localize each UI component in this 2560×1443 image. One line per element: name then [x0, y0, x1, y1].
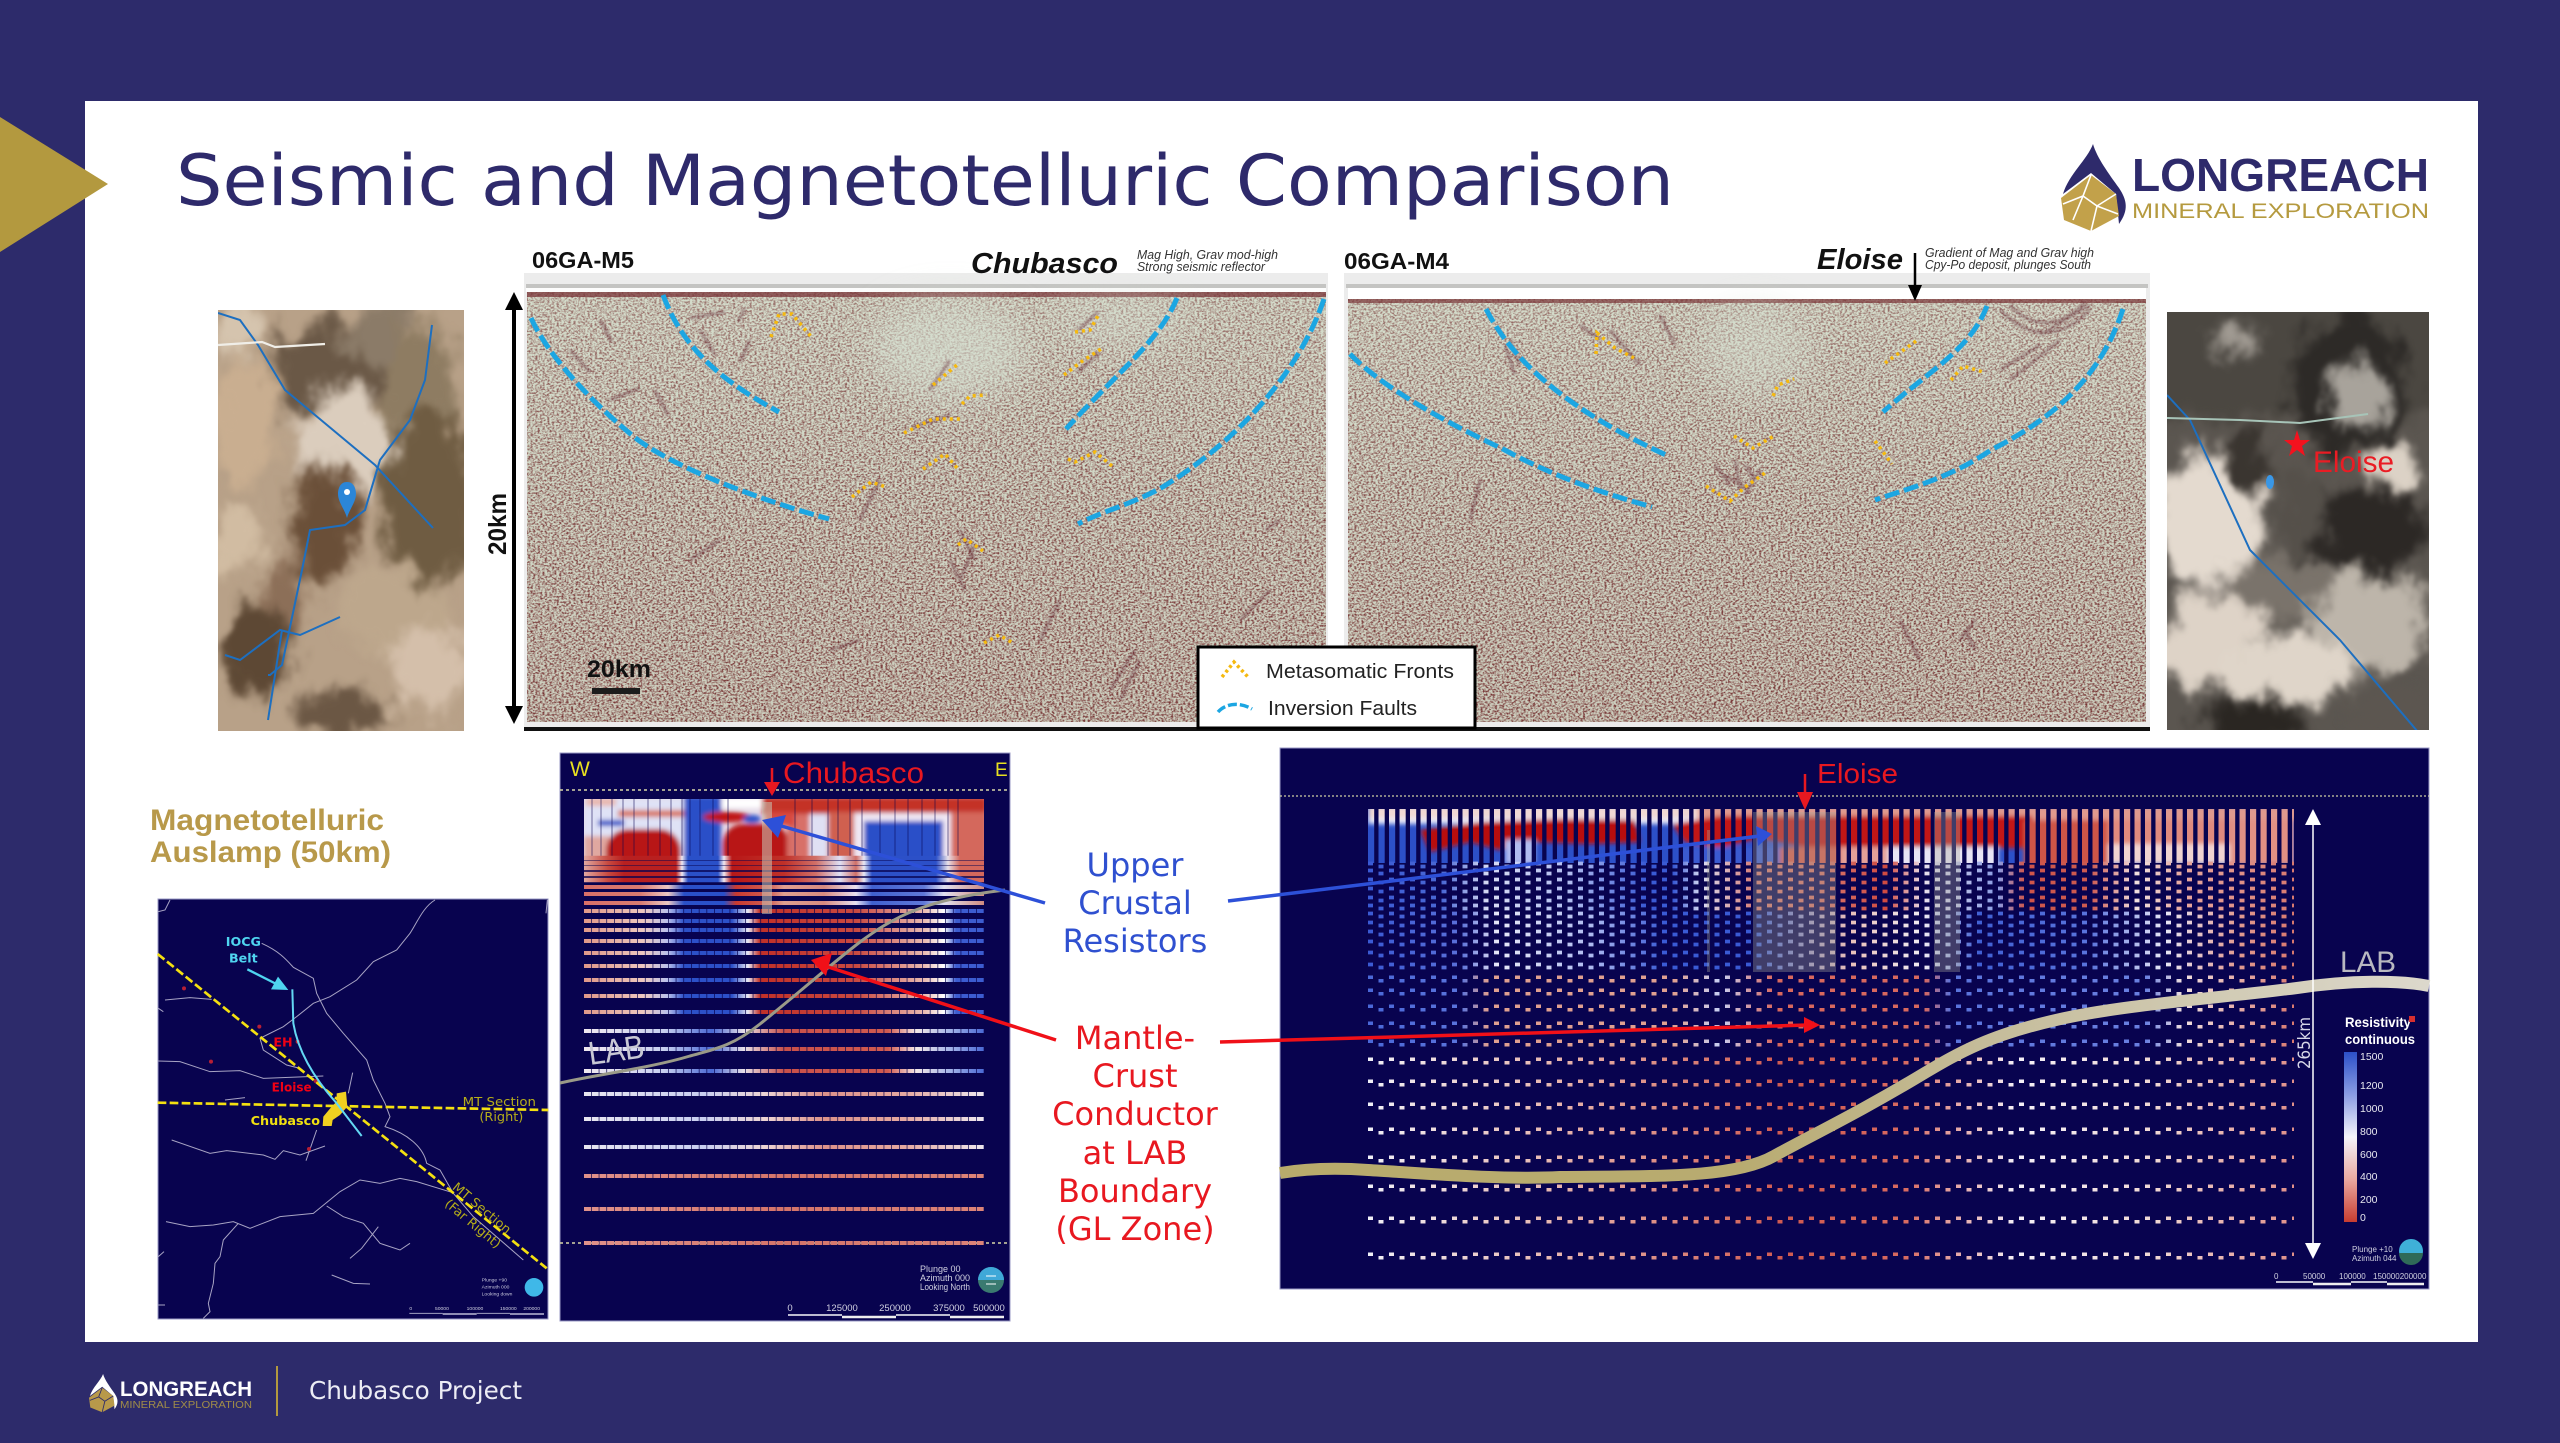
label: E: E [995, 760, 1008, 781]
icon: location pin [2266, 475, 2274, 489]
label: Eloise: Eloise [1817, 758, 1898, 789]
label: MT Section Right: MT Section [463, 1094, 536, 1109]
legend: resistivity colour scale: 600 [2360, 1149, 2378, 1161]
surface dotted line [1280, 795, 2429, 797]
title: Seismic and Magnetotelluric Comparison [176, 140, 1674, 222]
view orientation note [920, 1264, 970, 1292]
arrow: upper crustal resistors to Chubasco [762, 815, 1045, 903]
resistivity rows shallow [1368, 914, 2294, 968]
callout: Mantle-Crust Conductor: Crust [1092, 1057, 1178, 1095]
legend label: inversion faults: Inversion Faults [1268, 698, 1417, 720]
scale bar: 150000200000 [2373, 1272, 2427, 1281]
legend: resistivity colour scale: continuous [2345, 1031, 2415, 1047]
logo wordmark: LONGREACH [2132, 149, 2429, 201]
heading: Magnetotelluric Auslamp [150, 804, 391, 869]
label: LAB: LAB [2340, 946, 2396, 979]
label: MT Section Far Right: (Far Right) [442, 1196, 504, 1251]
heading: Magnetotelluric Auslamp: Magnetotelluric [150, 804, 384, 837]
scale bar: 375000 [933, 1303, 965, 1314]
view orientation note: Looking North [920, 1282, 970, 1292]
legend: resistivity colour scale: 200 [2360, 1194, 2378, 1206]
icon: globe [525, 1278, 543, 1297]
note: Eloise geophysics: Cpy-Po deposit, plunges South [1925, 257, 2091, 272]
callout: Mantle-Crust Conductor: (GL Zone) [1055, 1210, 1215, 1248]
arrow: conductor to Chubasco [811, 953, 1056, 1040]
label: MT Section Far Right [442, 1179, 514, 1251]
baseline rule [524, 727, 2150, 731]
label: MT Section Far Right: MT Section [450, 1179, 514, 1237]
label: MT Section Right: (Right) [479, 1109, 523, 1124]
scale bar [2274, 1272, 2427, 1284]
resistivity rows conductor [584, 911, 984, 1012]
Chubasco project area [323, 1092, 347, 1126]
seismic reflector streaks [570, 308, 1280, 700]
label: W: W [570, 758, 590, 781]
scale bar [409, 1306, 544, 1314]
legend: resistivity colour scale: 1200 [2360, 1080, 2384, 1092]
vertical station stripes [592, 799, 958, 857]
arrow: 265km depth range [2305, 809, 2321, 1259]
label: EH: EH [273, 1035, 293, 1050]
legend: resistivity colour scale: Resistivity [2345, 1014, 2411, 1030]
scale bar: 0 [787, 1303, 793, 1314]
scale bar: 150000 [500, 1306, 517, 1312]
heading: Chubasco: Chubasco [971, 248, 1118, 280]
icon: logo drop [2061, 144, 2126, 231]
note: Chubasco geophysics: Mag High, Grav mod-high [1137, 247, 1278, 262]
rivers and drainage [158, 900, 547, 1318]
panel: MT section (Chubasco) [560, 753, 1010, 1321]
icon: footer logo [89, 1374, 117, 1412]
note: Chubasco geophysics: Strong seismic reflector [1137, 259, 1266, 274]
view orientation note [2352, 1245, 2397, 1263]
scale bar: 100000 [467, 1306, 484, 1312]
panel: MT section (Eloise) [1280, 748, 2429, 1289]
arrow: Eloise location [1908, 253, 1922, 301]
label: MT Section Right [463, 1094, 536, 1124]
label: Chubasco: Chubasco [783, 757, 924, 790]
callout: Upper Crustal Resistors: Resistors [1063, 922, 1207, 960]
logo: Longreach Mineral Exploration [2061, 144, 2429, 231]
legend: resistivity colour scale: 400 [2360, 1171, 2378, 1183]
note: Eloise geophysics [1925, 245, 2094, 272]
callout: Upper Crustal Resistors: Upper [1087, 846, 1184, 884]
resistivity rows upper [1368, 864, 2294, 908]
metasomatic fronts [1596, 333, 1983, 501]
view orientation note: Plunge +90 [482, 1278, 507, 1284]
view orientation note: Plunge 00 [920, 1264, 961, 1274]
scale bar: 50000 [2303, 1272, 2326, 1281]
legend [1198, 647, 1475, 728]
icon: globe [2399, 1239, 2423, 1265]
legend: resistivity colour scale: 1500 [2360, 1051, 2384, 1063]
label: LAB: LAB [586, 1027, 646, 1072]
arrow: conductor to Eloise [1220, 1017, 1820, 1042]
resistivity rows deepest [584, 1176, 984, 1243]
callout: Upper Crustal Resistors [1063, 846, 1207, 960]
footer tagline: MINERAL EXPLORATION [120, 1400, 252, 1411]
seismic reflector streaks [1470, 302, 2090, 660]
label: IOCG Belt: Belt [229, 950, 258, 965]
resistivity rows deep [584, 1094, 984, 1147]
scale bar: 200000 [523, 1306, 540, 1312]
view orientation note: Plunge +10 [2352, 1245, 2393, 1254]
logo tagline: MINERAL EXPLORATION [2132, 200, 2429, 223]
surface and LAB depth dotted lines [560, 790, 1010, 1243]
resistivity rows deep [1368, 1059, 2294, 1258]
legend swatch: metasomatic fronts [1222, 662, 1248, 677]
heading: Magnetotelluric Auslamp: Auslamp (50km) [150, 836, 391, 869]
label: Eloise: Eloise [2313, 446, 2394, 479]
resistivity section top block [584, 799, 984, 856]
scale bar: 0 [409, 1306, 412, 1312]
panel: right aeromagnetic map [2167, 312, 2429, 730]
arrow: IOCG belt [247, 969, 288, 990]
label: Eloise: Eloise [272, 1081, 312, 1095]
scale bar: 500000 [973, 1303, 1005, 1314]
IOCG belt [292, 989, 362, 1136]
view orientation note: Azimuth 000 [920, 1273, 970, 1283]
LAB ribbon [1280, 982, 2429, 1178]
callout: Mantle-Crust Conductor: at LAB [1083, 1134, 1187, 1172]
footer divider [276, 1366, 278, 1416]
legend label: metasomatic fronts: Metasomatic Fronts [1266, 661, 1454, 683]
panel: seismic section 06GA-M5 [524, 273, 1328, 728]
resistivity rows conductor [1368, 977, 2294, 1045]
resistivity rows mid [584, 1031, 984, 1071]
arrow: Eloise location [1797, 774, 1813, 810]
scale bar [787, 1303, 1005, 1317]
LAB line [560, 890, 1005, 1083]
resistivity rows shallow [584, 887, 984, 903]
callout: Mantle-Crust Conductor: Boundary [1058, 1172, 1212, 1210]
label: 20km depth: 20km [484, 493, 512, 555]
metasomatic fronts [771, 314, 1112, 643]
scale bar: 0 [2274, 1272, 2279, 1281]
legend: resistivity colour scale: 800 [2360, 1126, 2378, 1138]
footer [89, 1366, 522, 1416]
arrow: Chubasco location [764, 768, 780, 796]
borehole column [762, 802, 772, 914]
label: IOCG Belt [226, 934, 261, 965]
callout: Mantle-Crust Conductor: Mantle- [1075, 1019, 1195, 1057]
survey line M4 [2167, 395, 2429, 745]
footer wordmark: LONGREACH [120, 1378, 252, 1401]
panel: Auslamp location map [158, 899, 548, 1319]
scale label: 20km [587, 656, 651, 683]
MT section lines [158, 954, 548, 1268]
resistivity rows top [584, 858, 984, 880]
heading: Eloise: Eloise [1817, 244, 1903, 276]
callout: Mantle-Crust Conductor [1052, 1019, 1219, 1248]
callout: Mantle-Crust Conductor: Conductor [1052, 1095, 1219, 1133]
deposit markers [182, 986, 318, 1151]
label: Chubasco: Chubasco [251, 1114, 320, 1128]
arrow: 20km depth scale [505, 292, 523, 724]
legend: resistivity colour scale: 1000 [2360, 1103, 2384, 1115]
legend: resistivity colour scale: 0 [2360, 1212, 2366, 1224]
icon: globe [978, 1267, 1004, 1293]
legend swatch: inversion faults [1218, 704, 1252, 712]
panel: left satellite map [218, 310, 464, 731]
scale bar [592, 688, 640, 694]
label: 265km: 265km [2295, 1017, 2315, 1069]
section label 06GA-M5: 06GA-M5 [532, 247, 634, 273]
scale bar: 50000 [435, 1306, 449, 1312]
translucent borehole blocks [1707, 812, 1960, 972]
section label 06GA-M4: 06GA-M4 [1344, 248, 1449, 274]
note: Eloise geophysics: Gradient of Mag and Grav high [1925, 245, 2094, 260]
label: IOCG Belt: IOCG [226, 934, 261, 949]
view orientation note: Looking down [482, 1292, 513, 1298]
survey lines [218, 313, 433, 720]
inversion faults [531, 295, 1324, 524]
icon: location pin [338, 482, 356, 518]
resistivity section top block [1368, 809, 2294, 863]
scale bar: 100000 [2339, 1272, 2366, 1281]
callout: Upper Crustal Resistors: Crustal [1078, 884, 1192, 922]
view orientation note [482, 1278, 513, 1298]
inversion faults [1350, 306, 2123, 507]
view orientation note: Azimuth 044 [2352, 1254, 2397, 1263]
legend: resistivity colour scale [2344, 1014, 2415, 1224]
gold triangle marker [0, 117, 108, 252]
scale bar: 250000 [879, 1303, 911, 1314]
project name: Chubasco Project [309, 1376, 522, 1405]
scale bar: 125000 [826, 1303, 858, 1314]
panel: seismic section 06GA-M4 [1344, 273, 2150, 728]
note: Chubasco geophysics [1137, 247, 1278, 274]
icon: Eloise star [2284, 430, 2310, 456]
section trace [2167, 414, 2368, 423]
view orientation note: Azimuth 000 [482, 1285, 510, 1291]
arrow: upper crustal resistors to Eloise [1228, 826, 1772, 901]
